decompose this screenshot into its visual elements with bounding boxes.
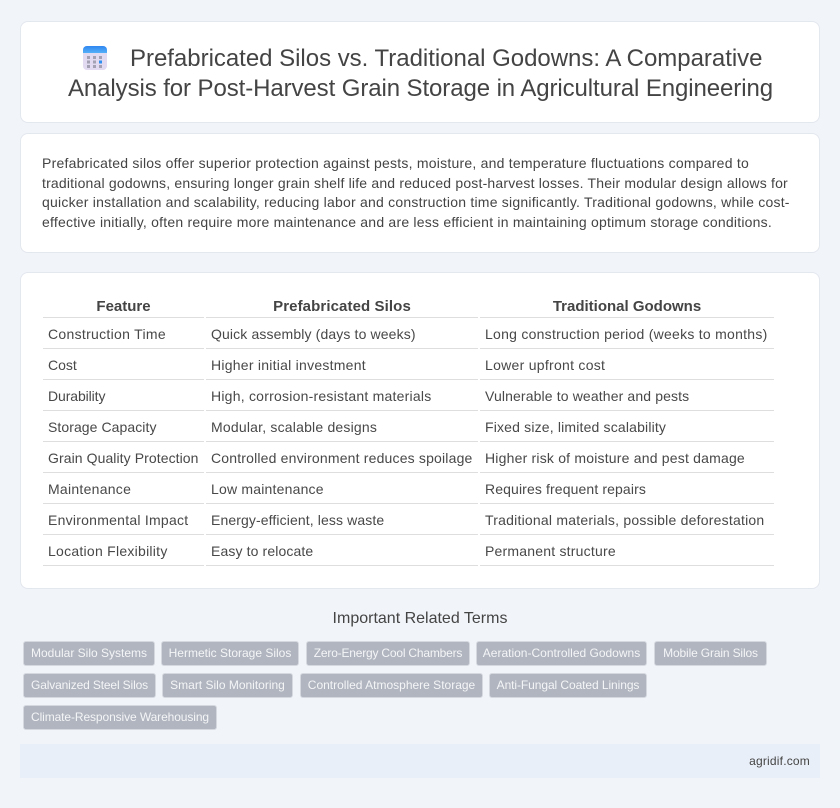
row: Construction Time <box>48 326 768 342</box>
row: Durability: High, corrosion-resistant materials <box>211 388 431 404</box>
row: Durability: Durability <box>48 388 105 404</box>
row: Cost: Cost <box>48 357 77 373</box>
row: Grain Quality Protection: Higher risk of moisture and pest damage <box>485 450 745 466</box>
intro text: traditional godowns, ensuring longer grain shelf life and reduced post-harvest losses. Their modular design allows for <box>42 175 788 191</box>
row: Storage Capacity: Storage Capacity <box>48 419 157 435</box>
row: Storage Capacity: Modular, scalable designs <box>211 419 377 435</box>
row: Construction Time: Long construction period (weeks to months) <box>485 326 768 342</box>
row: Storage Capacity: Fixed size, limited scalability <box>485 419 666 435</box>
tag: Smart Silo Monitoring <box>170 678 285 692</box>
tag <box>161 641 299 666</box>
header: Prefabricated Silos: Prefabricated Silos <box>273 298 411 315</box>
row: Cost: Higher initial investment <box>211 357 366 373</box>
intro text: quicker installation and scalability, reducing labor and construction time significantly. Traditional godowns, while cost- <box>42 194 790 210</box>
tag: Aeration-Controlled Godowns <box>483 646 640 660</box>
row: Environmental Impact: Energy-efficient, less waste <box>211 512 384 528</box>
tag <box>654 641 767 666</box>
row: Durability: Vulnerable to weather and pests <box>485 388 689 404</box>
icon: calendar grid <box>83 46 107 70</box>
tag: Modular Silo Systems <box>31 646 147 660</box>
heading: related terms: Important Related Terms <box>333 610 507 627</box>
header: Traditional Godowns: Traditional Godowns <box>553 298 701 315</box>
row: Grain Quality Protection <box>48 450 745 466</box>
tag <box>489 673 647 698</box>
row: Environmental Impact: Traditional materials, possible deforestation <box>485 512 764 528</box>
tag <box>162 673 293 698</box>
tag: Anti-Fungal Coated Linings <box>497 678 639 692</box>
row: Location Flexibility: Easy to relocate <box>211 543 313 559</box>
related term tags <box>23 641 767 730</box>
tag: Zero-Energy Cool Chambers <box>314 646 462 660</box>
row: Maintenance: Maintenance <box>48 481 131 497</box>
row: Grain Quality Protection: Controlled environment reduces spoilage <box>211 450 473 466</box>
tag <box>476 641 647 666</box>
tag <box>23 705 217 730</box>
row: Location Flexibility: Permanent structure <box>485 543 616 559</box>
panel: introduction <box>20 133 820 253</box>
row: Cost: Lower upfront cost <box>485 357 605 373</box>
row: Storage Capacity <box>48 419 666 435</box>
row: Maintenance <box>48 481 646 497</box>
row: Environmental Impact: Environmental Impact <box>48 512 188 528</box>
panel: title card <box>20 21 820 123</box>
tag <box>23 641 155 666</box>
header: Feature: Feature <box>96 298 151 315</box>
tag <box>306 641 470 666</box>
row: Grain Quality Protection: Grain Quality Protection <box>48 450 199 466</box>
tag: Controlled Atmosphere Storage <box>308 678 475 692</box>
title: Prefabricated Silos vs. Traditional Godowns: A Comparative <box>130 45 762 72</box>
intro text <box>42 155 790 230</box>
tag <box>23 673 156 698</box>
row: Durability <box>48 388 689 404</box>
row: Location Flexibility: Location Flexibility <box>48 543 168 559</box>
panel: comparison table <box>20 272 820 589</box>
intro text: effective initially, often require more maintenance and are less efficient in maintaining optimum storage conditions. <box>42 214 772 230</box>
tag: Galvanized Steel Silos <box>31 678 148 692</box>
tag: Hermetic Storage Silos <box>169 646 291 660</box>
tag <box>300 673 483 698</box>
row: Environmental Impact <box>48 512 764 528</box>
intro text: Prefabricated silos offer superior protection against pests, moisture, and temperature fluctuations compared to <box>42 155 749 171</box>
row: Location Flexibility <box>48 543 616 559</box>
row: Maintenance: Low maintenance <box>211 481 324 497</box>
tag: Climate-Responsive Warehousing <box>31 710 209 724</box>
row: Construction Time: Quick assembly (days to weeks) <box>211 326 416 342</box>
title <box>68 45 773 102</box>
row: Cost <box>48 357 605 373</box>
comparison table <box>43 298 774 566</box>
row: Maintenance: Requires frequent repairs <box>485 481 646 497</box>
title: Analysis for Post-Harvest Grain Storage in Agricultural Engineering <box>68 75 773 102</box>
row: Construction Time: Construction Time <box>48 326 166 342</box>
footer site name: agridif.com <box>749 754 810 768</box>
footer bar <box>20 744 820 778</box>
tag: Mobile Grain Silos <box>663 646 758 660</box>
